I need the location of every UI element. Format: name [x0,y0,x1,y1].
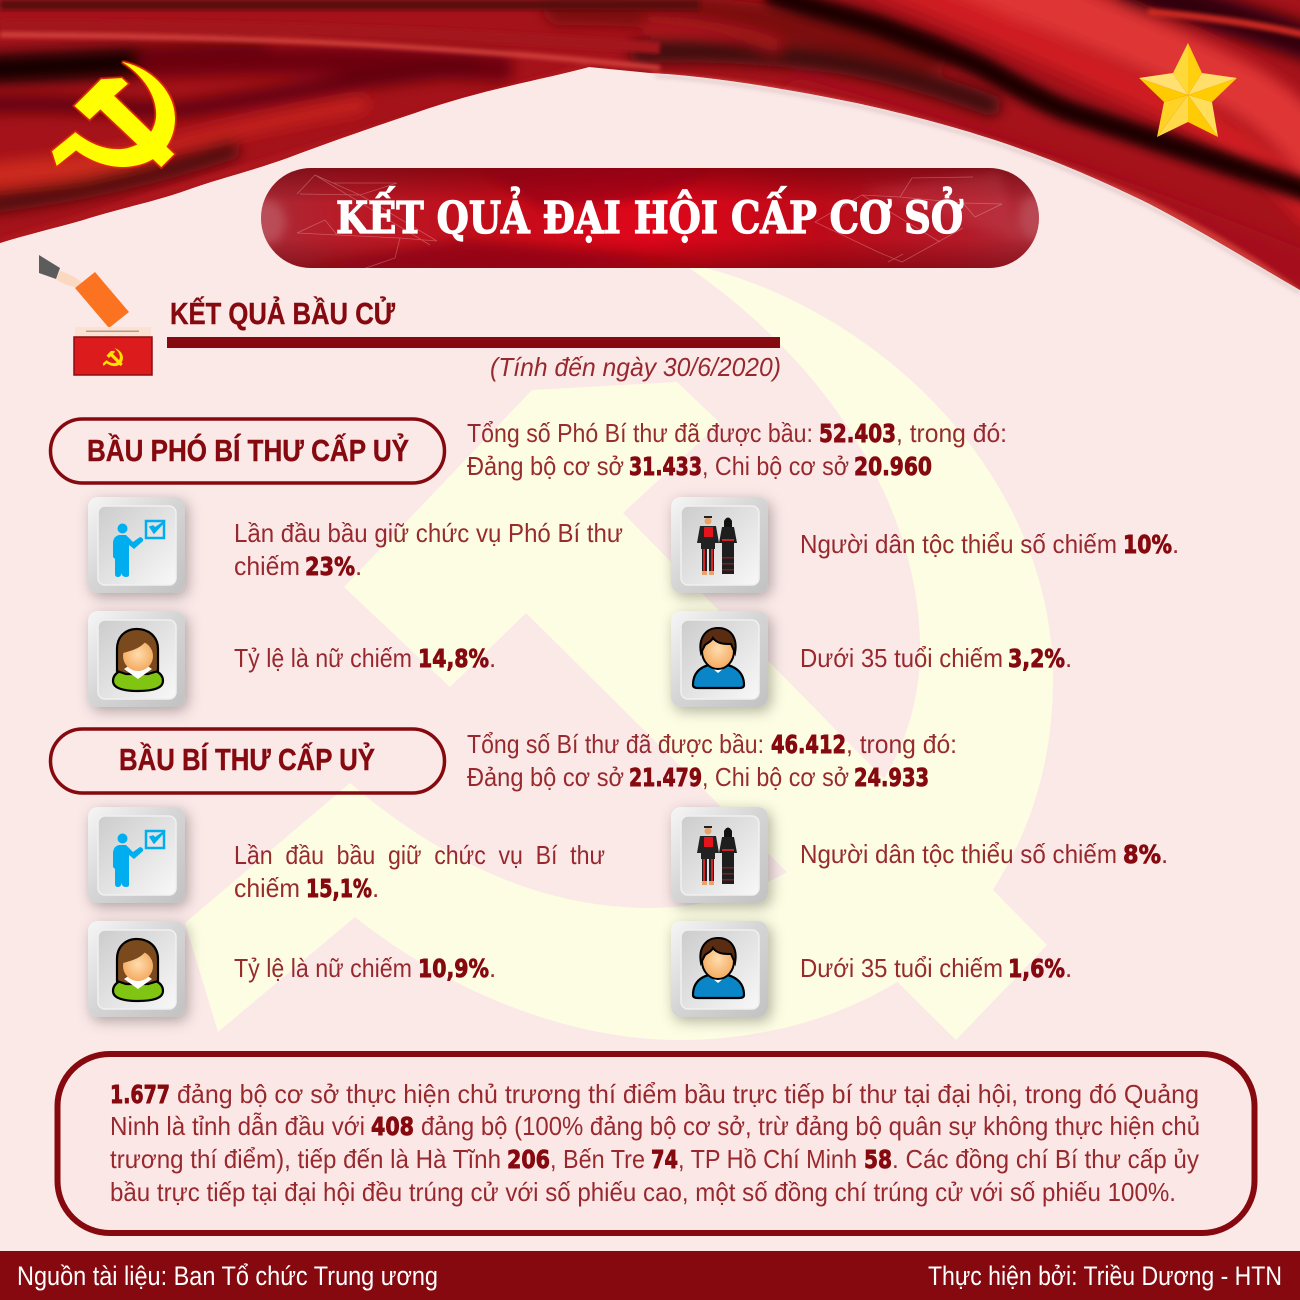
section heading [167,295,780,348]
text: first-time deputy: chiếm [234,551,300,581]
text: under 35 deputy: 3,2% [1008,644,1065,673]
text: women deputy: 14,8% [418,644,489,673]
panel: direct election summary: 58 [864,1145,892,1174]
text: women secretary: . [489,953,496,983]
text: ethnic minority secretary: Người dân tộc thiểu số chiếm [800,839,1117,869]
icon: teacher checklist tile [88,807,185,903]
text: deputy secretary totals: 20.960 [854,452,932,481]
text: secretary totals: , Chi bộ cơ sở [702,762,849,792]
text: secretary totals [467,729,957,792]
icon: ethnic couple tile [671,807,768,903]
panel: direct election summary [58,1054,1254,1233]
panel: direct election summary: bầu trực tiếp tại đại hội đều trúng cử với số phiếu cao, một số đồng chí trúng cử với số phiếu 100%. [110,1177,1176,1207]
panel: direct election summary: , Bến Tre [550,1144,645,1174]
text: women deputy: . [489,643,496,673]
text: deputy secretary totals: , Chi bộ cơ sở [702,451,849,481]
panel: direct election summary: 74 [651,1145,678,1174]
pill: secretary heading: BẦU BÍ THƯ CẤP UỶ [119,742,375,777]
panel: direct election summary: trương thí điểm), tiếp đến là Hà Tĩnh [110,1144,501,1174]
icon: woman tile [88,921,185,1017]
pill: secretary heading [50,729,444,793]
ribbon edge shadow [655,76,1300,293]
panel: direct election summary: Ninh là tỉnh dẫn đầu với [110,1111,365,1141]
text: ethnic minority deputy: 10% [1123,530,1172,559]
text: ethnic minority secretary: 8% [1123,840,1161,869]
text: first-time secretary: Lần đầu bầu giữ chức vụ Bí thư [234,840,605,870]
text: secretary totals: Tổng số Bí thư đã được bầu: [467,729,764,759]
footer bar: Nguồn tài liệu: Ban Tổ chức Trung ương [17,1261,438,1291]
text: under 35 secretary: . [1065,953,1072,983]
text: first-time secretary: chiếm [234,873,300,903]
text: ethnic minority deputy: Người dân tộc thiểu số chiếm [800,529,1117,559]
text: secretary totals: 21.479 [629,763,702,792]
text: secretary totals: 46.412 [771,730,846,759]
watermark: hammer and sickle [185,262,1053,1040]
panel: direct election summary: , TP Hồ Chí Minh [678,1144,857,1174]
text: under 35 secretary: Dưới 35 tuổi chiếm [800,953,1003,983]
panel: direct election summary: 206 [507,1145,550,1174]
icon: man tile [671,921,768,1017]
date note: (Tính đến ngày 30/6/2020) [490,352,781,382]
title banner [246,168,1050,270]
title text: KẾT QUẢ ĐẠI HỘI CẤP CƠ SỞ [336,185,964,244]
text: first-time secretary [234,840,605,903]
section heading: KẾT QUẢ BẦU CỬ [170,295,395,331]
text: secretary totals: 24.933 [854,763,929,792]
icon: gold star [1139,43,1237,137]
text: women secretary: 10,9% [418,954,489,983]
text: deputy secretary totals: Tổng số Phó Bí thư đã được bầu: [467,418,813,448]
icon: ballot box [39,255,152,375]
icon: woman tile [88,611,185,707]
panel: direct election summary: đảng bộ (100% đảng bộ cơ sở, trừ đảng bộ quân sự không thực hiện chủ [421,1111,1200,1141]
icon: ethnic couple tile [671,497,768,593]
red ribbon banner [0,0,1300,300]
text: first-time deputy: Lần đầu bầu giữ chức vụ Phó Bí thư [234,518,623,548]
text: deputy secretary totals: , trong đó: [896,418,1007,448]
panel: direct election summary: 408 [371,1112,414,1141]
panel: direct election summary: 1.677 [110,1080,170,1109]
text: first-time secretary: . [372,873,379,903]
text: secretary totals: Đảng bộ cơ sở [467,762,624,792]
text: deputy secretary totals: 52.403 [819,419,896,448]
text: deputy secretary totals [467,418,1007,481]
text: first-time secretary: 15,1% [306,874,372,903]
text: women deputy: Tỷ lệ là nữ chiếm [234,643,412,673]
panel: direct election summary: đảng bộ cơ sở thực hiện chủ trương thí điểm bầu trực tiếp bí thư tại đại hội, trong đó Quảng [177,1079,1199,1109]
text: women secretary: Tỷ lệ là nữ chiếm [234,953,412,983]
text: deputy secretary totals: 31.433 [629,452,702,481]
pill: deputy secretary heading [50,419,444,483]
text: deputy secretary totals: Đảng bộ cơ sở [467,451,624,481]
icon: teacher checklist tile [88,497,185,593]
footer bar [0,1251,1300,1300]
icon: hammer and sickle logo [52,62,175,167]
text: ethnic minority secretary: . [1161,839,1168,869]
text: under 35 secretary: 1,6% [1008,954,1065,983]
text: under 35 deputy: . [1065,643,1072,673]
icon: man tile [671,611,768,707]
text: first-time deputy: 23% [305,552,355,581]
pill: deputy secretary heading: BẦU PHÓ BÍ THƯ CẤP UỶ [87,432,409,468]
panel: direct election summary: . Các đồng chí Bí thư cấp ủy [892,1144,1199,1174]
text: first-time deputy [234,518,623,581]
text: ethnic minority deputy: . [1172,529,1179,559]
text: secretary totals: , trong đó: [846,729,957,759]
text: first-time deputy: . [355,551,362,581]
text: under 35 deputy: Dưới 35 tuổi chiếm [800,643,1003,673]
